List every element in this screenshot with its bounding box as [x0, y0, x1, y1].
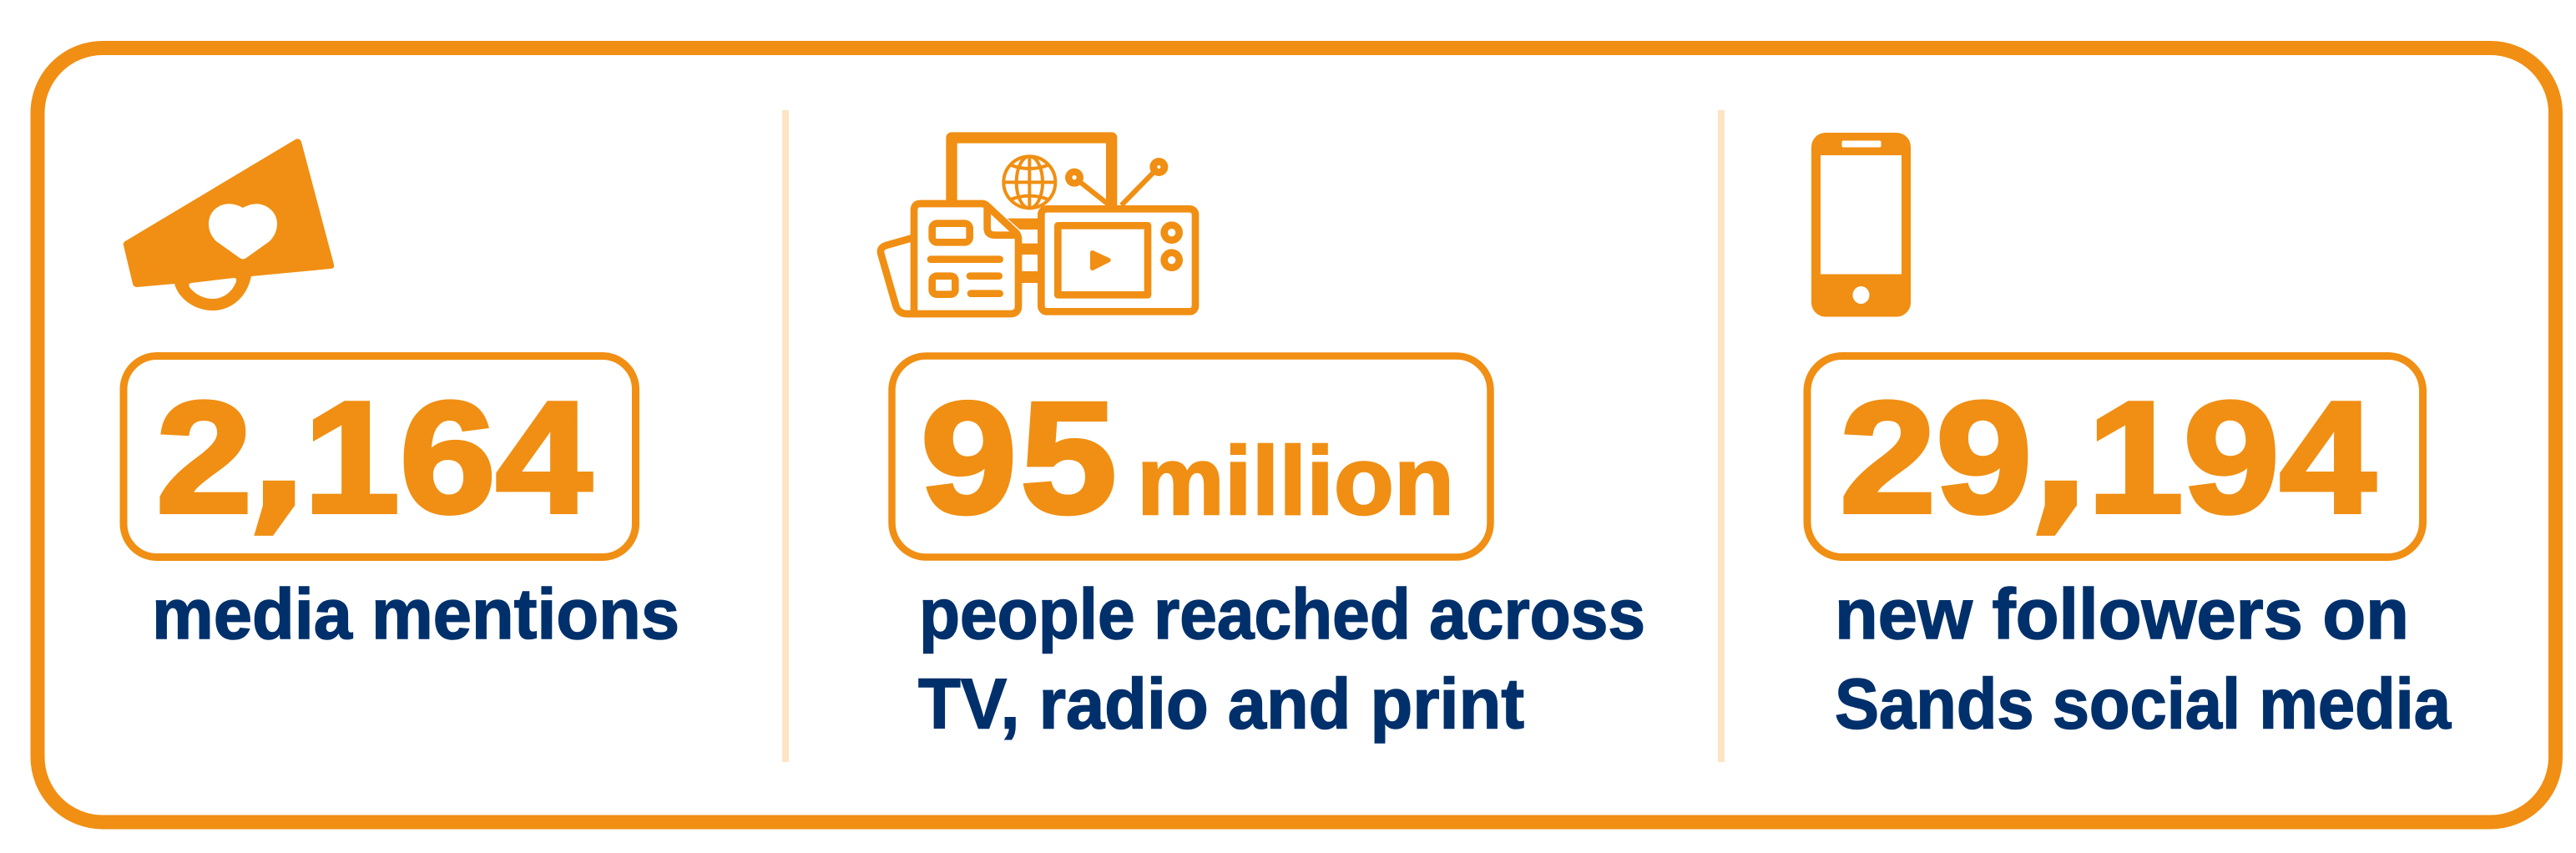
- label: media mentions: media mentions: [152, 575, 679, 654]
- icon: TV, radio and print media: [881, 138, 1195, 314]
- icon part: connecting bars: [1008, 219, 1041, 283]
- label: people reached across TV, radio and print: people reached across: [919, 575, 1645, 654]
- icon part: antennae: [1065, 158, 1168, 205]
- stat box: 95 million: [891, 356, 1491, 558]
- panel: media mentions: [124, 139, 679, 654]
- number: 2,164: 2: [156, 369, 252, 547]
- icon part: globe: [1003, 156, 1055, 208]
- label: people reached across TV, radio and print: [918, 575, 1645, 744]
- number: 29,194: 194: [2087, 369, 2376, 547]
- divider: left: [782, 110, 789, 762]
- icon part: back monitor: [952, 138, 1112, 206]
- label: new followers on Sands social media: Sands social media: [1835, 664, 2452, 744]
- label: people reached across TV, radio and print: TV, radio and print: [918, 664, 1524, 744]
- divider: right: [1718, 110, 1725, 762]
- icon: smartphone: [1811, 133, 1911, 317]
- icon part: document: [914, 204, 1018, 314]
- number: 29,194: ,: [2026, 358, 2095, 552]
- stat box: 29,194: [1807, 356, 2422, 558]
- icon: megaphone with heart: [124, 139, 334, 310]
- number: 2,164: ,: [245, 358, 314, 552]
- unit: million: million: [1137, 426, 1454, 535]
- label: new followers on Sands social media: [1835, 575, 2452, 744]
- number: 29,194: 29: [1840, 369, 2032, 547]
- panel: people reached: [881, 138, 1645, 744]
- icon part: back card: [881, 238, 916, 314]
- panel: social followers: [1807, 133, 2452, 744]
- stat box: 2,164: [124, 356, 636, 558]
- number: 2,164: 164: [304, 369, 592, 547]
- icon part: television: [1041, 209, 1195, 311]
- number: 95: 95: [921, 370, 1120, 547]
- label: new followers on Sands social media: new followers on: [1835, 575, 2409, 654]
